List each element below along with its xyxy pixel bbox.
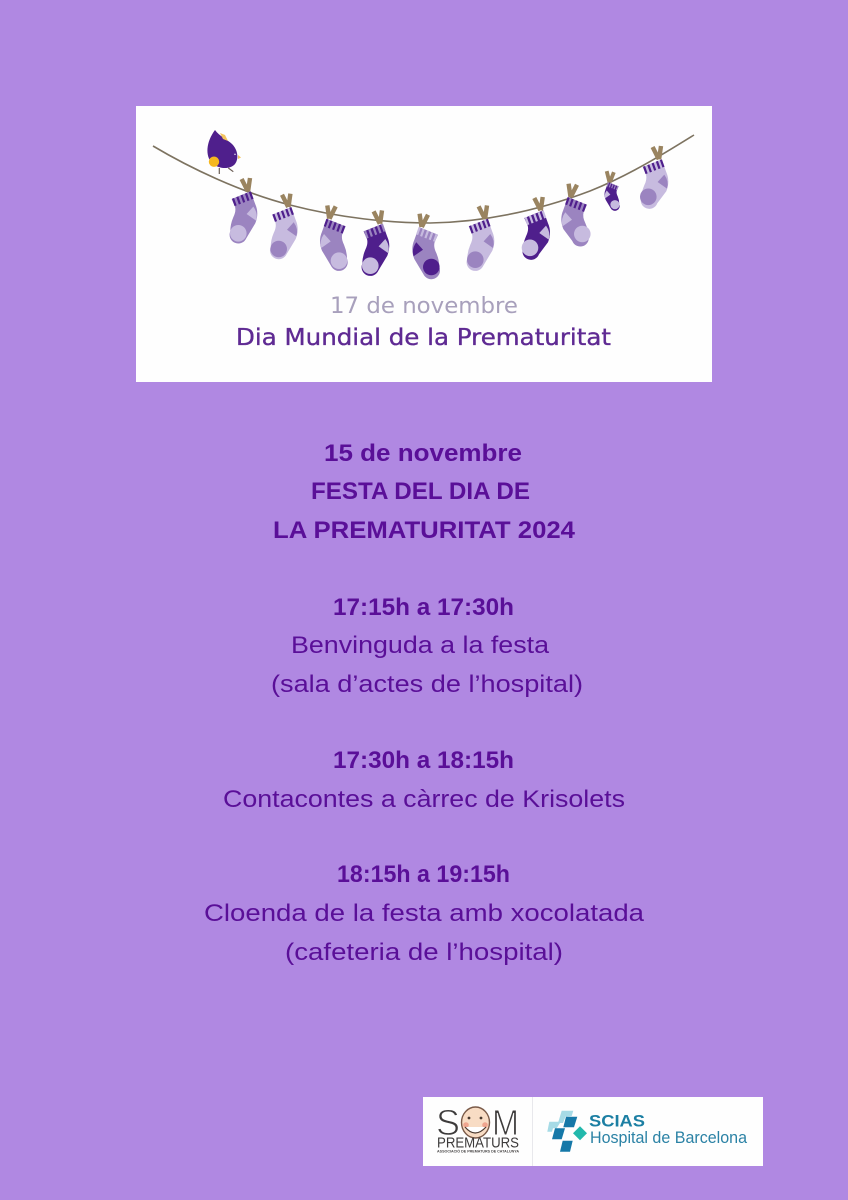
panel: partner logos: [423, 1097, 763, 1166]
icon: bird: [207, 130, 241, 174]
schedule item 3: 18:15h a 19:15h: [337, 861, 510, 888]
logo: Som Prematurs: ASSOCIACIÓ DE PREMATURS DE CATALUNYA: [437, 1148, 519, 1154]
schedule item 2: Contacontes a càrrec de Krisolets: [223, 786, 625, 813]
panel: banner image: [136, 106, 712, 382]
schedule item 3: (cafeteria de l’hospital): [285, 939, 563, 966]
banner date: 17 de novembre: [330, 294, 518, 319]
logo: hospital name: Hospital de Barcelona: [590, 1128, 748, 1147]
sock 5: [412, 214, 440, 279]
logo: SCIAS name: SCIAS: [589, 1112, 645, 1130]
sock 9 small: [604, 171, 620, 211]
schedule item 3: Cloenda de la festa amb xocolatada: [204, 900, 645, 927]
heading: event title: LA PREMATURITAT 2024: [273, 517, 576, 544]
heading: event date: 15 de novembre: [324, 440, 522, 467]
sock 2: [270, 194, 298, 259]
sock 7: [522, 197, 550, 260]
sock 3: [320, 205, 348, 271]
sock 4: [362, 210, 389, 276]
sock 8: [561, 184, 591, 247]
logo: Som Prematurs: S: [436, 1102, 460, 1143]
schedule item 2: 17:30h a 18:15h: [333, 747, 514, 774]
logo: Som Prematurs: PREMATURS: [437, 1136, 519, 1152]
logo: Som Prematurs: [436, 1102, 519, 1154]
schedule item 2: [223, 747, 625, 813]
schedule item 1: (sala d’actes de l’hospital): [271, 671, 583, 698]
sock 10: [640, 146, 668, 209]
sock 6: [467, 205, 494, 271]
logo: SCIAS icon: [547, 1111, 587, 1152]
heading: event title: FESTA DEL DIA DE: [311, 478, 530, 505]
heading: event title: [273, 478, 576, 544]
schedule item 1: [271, 594, 583, 698]
logo: Som Prematurs: M: [492, 1102, 519, 1143]
schedule item 3: [204, 861, 645, 966]
banner title: Dia Mundial de la Prematuritat: [236, 325, 611, 351]
schedule item 1: 17:15h a 17:30h: [333, 594, 514, 621]
schedule item 1: Benvinguda a la festa: [291, 632, 550, 659]
sock 1: [230, 178, 257, 244]
clothesline: [153, 135, 694, 223]
